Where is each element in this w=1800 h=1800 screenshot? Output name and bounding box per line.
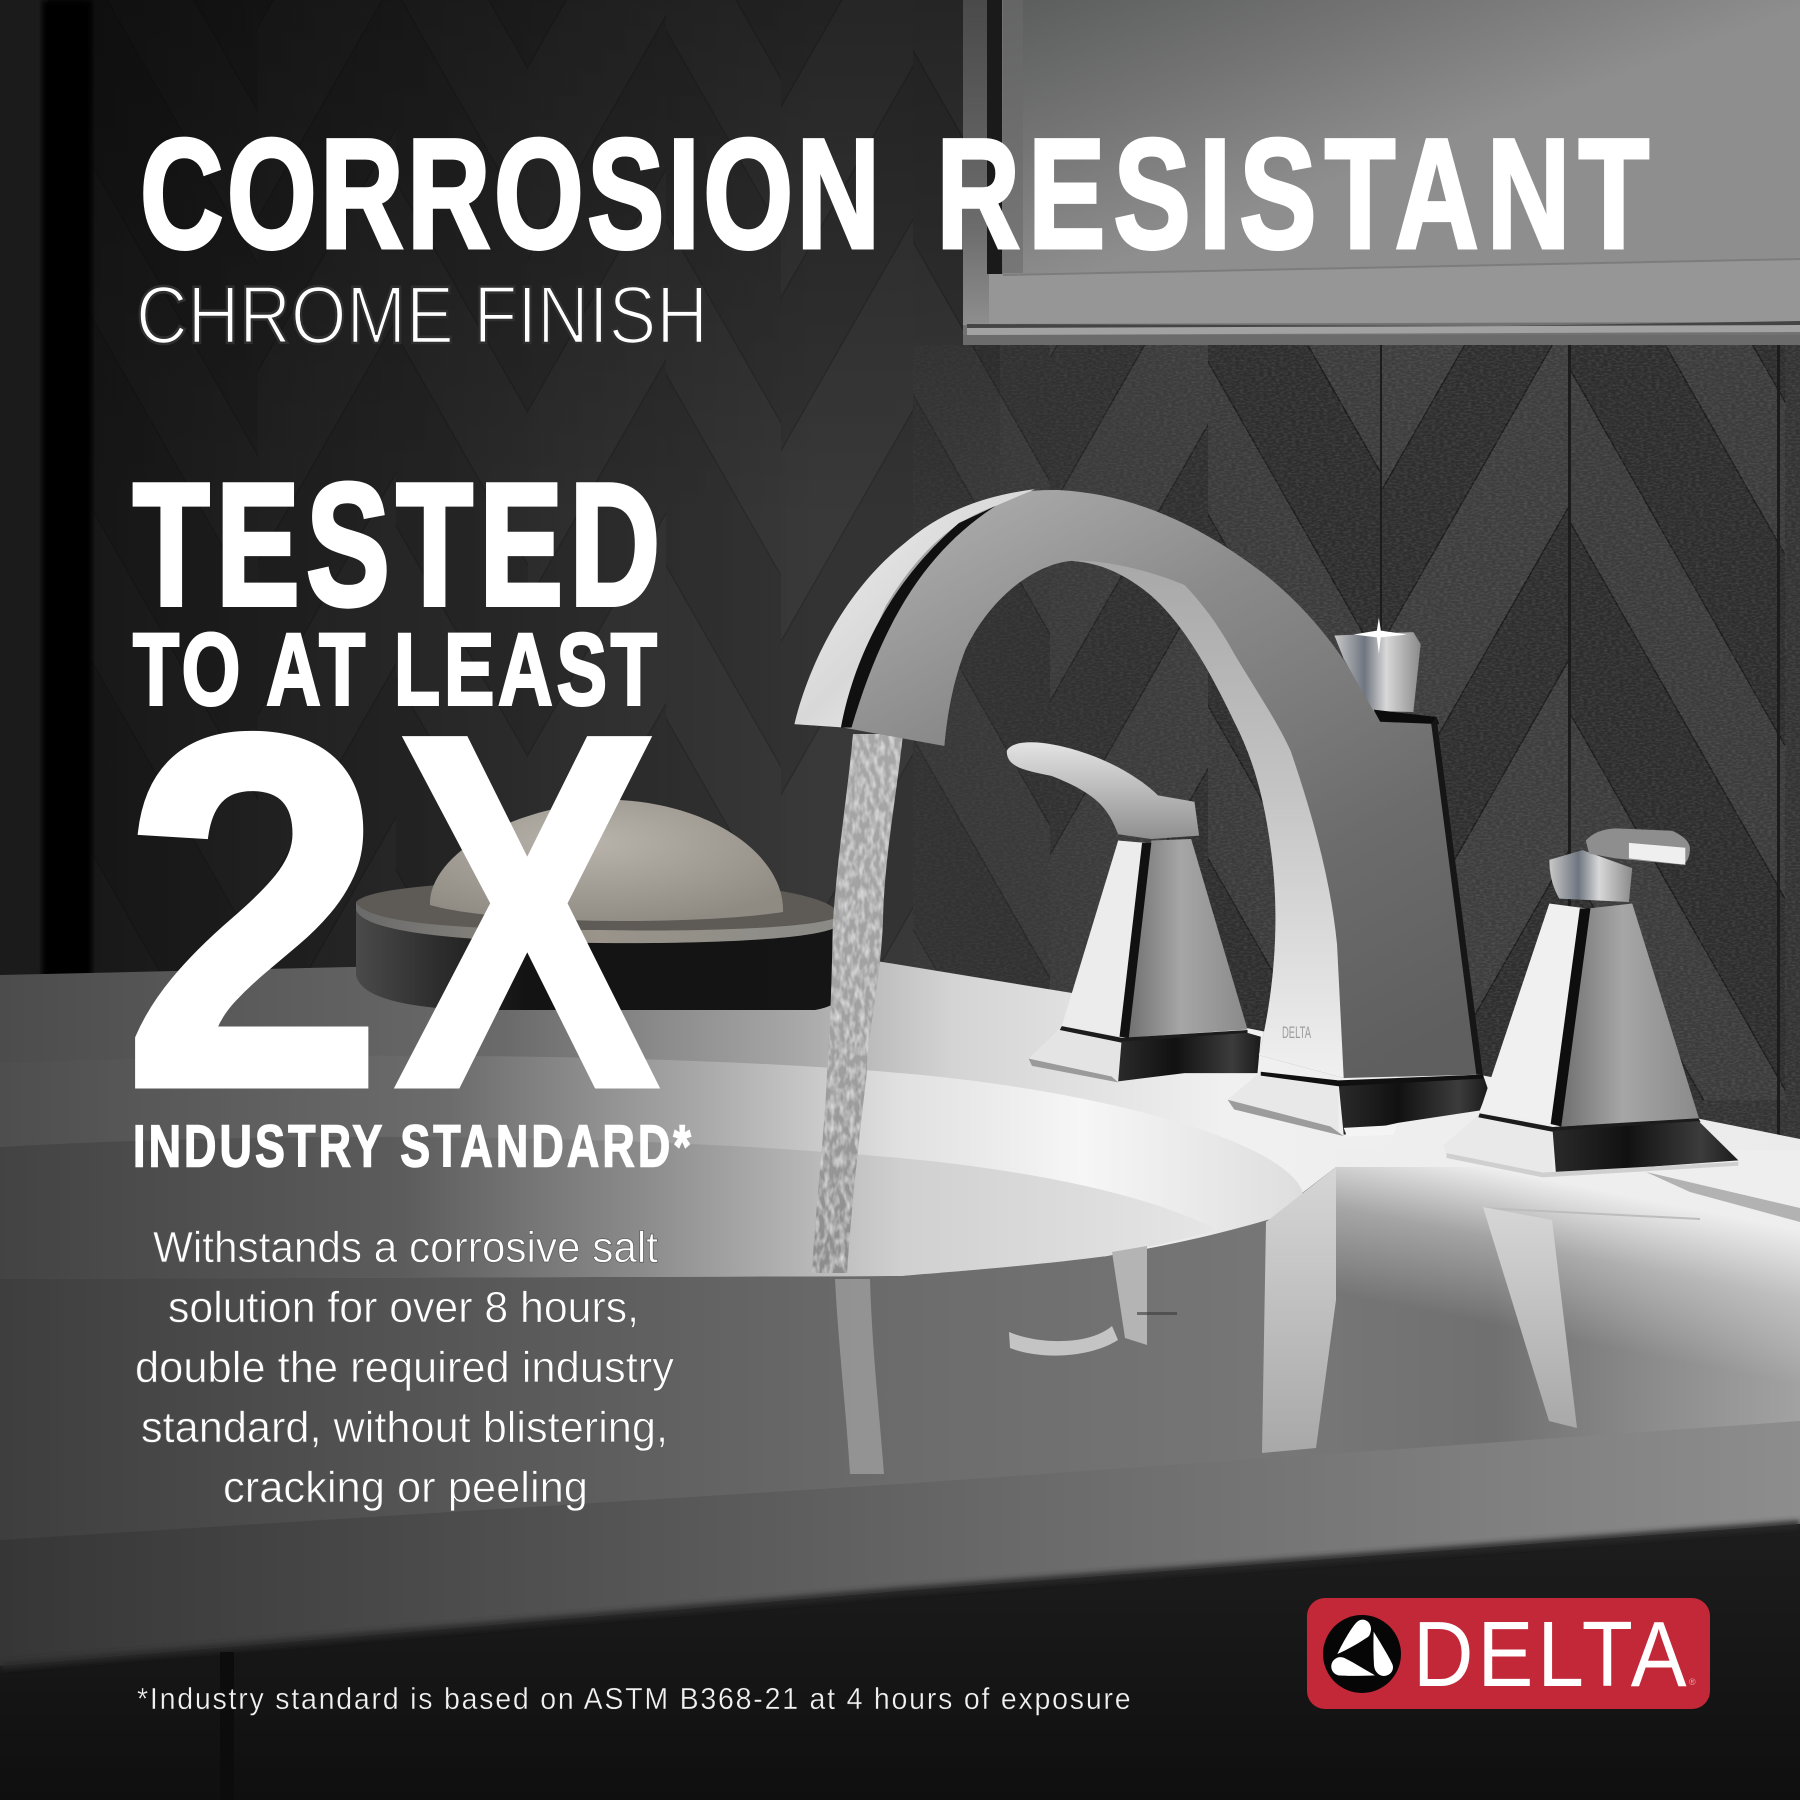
title	[140, 108, 1649, 282]
faucet body and spout	[794, 490, 1483, 1078]
Delta logo	[1307, 1598, 1710, 1709]
faucet	[794, 489, 1738, 1177]
body text: solution for over 8 hours,	[168, 1283, 639, 1332]
reflection area on counter	[0, 1150, 1800, 1560]
claim: tested to at least 2X: TO AT LEAST	[133, 614, 657, 727]
spout outer highlight	[794, 489, 1035, 728]
body text	[135, 1223, 674, 1512]
title: CORROSION	[140, 108, 880, 282]
spout black edge line	[841, 506, 995, 728]
inner arch strip	[1072, 561, 1344, 1078]
body text: standard, without blistering,	[141, 1403, 668, 1452]
sparkle	[1354, 618, 1407, 654]
dark cabinet	[0, 1524, 1800, 1800]
body text: double the required industry	[135, 1343, 674, 1392]
reflections of the faucet in the counter	[1009, 1167, 1577, 1453]
claim: tested to at least 2X	[121, 448, 691, 1194]
footnote: *Industry standard is based on ASTM B368-21 at 4 hours of exposure	[137, 1682, 1131, 1716]
title: RESISTANT	[936, 108, 1649, 282]
water stream and reflection	[812, 734, 903, 1474]
claim: tested to at least 2X: 2	[121, 628, 385, 1193]
body text: Withstands a corrosive salt	[153, 1223, 658, 1272]
main base	[1228, 1072, 1488, 1137]
body text: cracking or peeling	[223, 1463, 588, 1512]
background: textured herringbone wall	[0, 0, 1800, 1200]
faucet engraved logo: DELTA	[1282, 1023, 1311, 1042]
left base	[1029, 1026, 1261, 1082]
Delta logo: ®	[1689, 1677, 1696, 1687]
body black band	[1374, 710, 1439, 724]
icon: Delta tri-blade mark	[1331, 1620, 1393, 1676]
right base	[1443, 1113, 1738, 1177]
claim: tested to at least 2X: TESTED	[133, 448, 660, 642]
left handle cone	[1062, 839, 1248, 1038]
right handle cone	[1480, 904, 1699, 1126]
soap dish and soap	[356, 800, 840, 1010]
claim: tested to at least 2X: X	[394, 630, 662, 1194]
mirror	[963, 0, 1800, 345]
top lever knob	[1334, 632, 1421, 712]
sink basin interior	[0, 1137, 1215, 1279]
left handle lever	[1007, 742, 1199, 839]
counter front edge	[0, 1421, 1800, 1666]
vanity counter top	[0, 955, 1800, 1545]
right handle	[1549, 828, 1690, 902]
Delta logo: DELTA	[1413, 1602, 1687, 1706]
subtitle: CHROME FINISH	[136, 270, 708, 361]
sink basin rim	[0, 1056, 1302, 1279]
claim: tested to at least 2X: INDUSTRY STANDARD*	[133, 1115, 691, 1180]
